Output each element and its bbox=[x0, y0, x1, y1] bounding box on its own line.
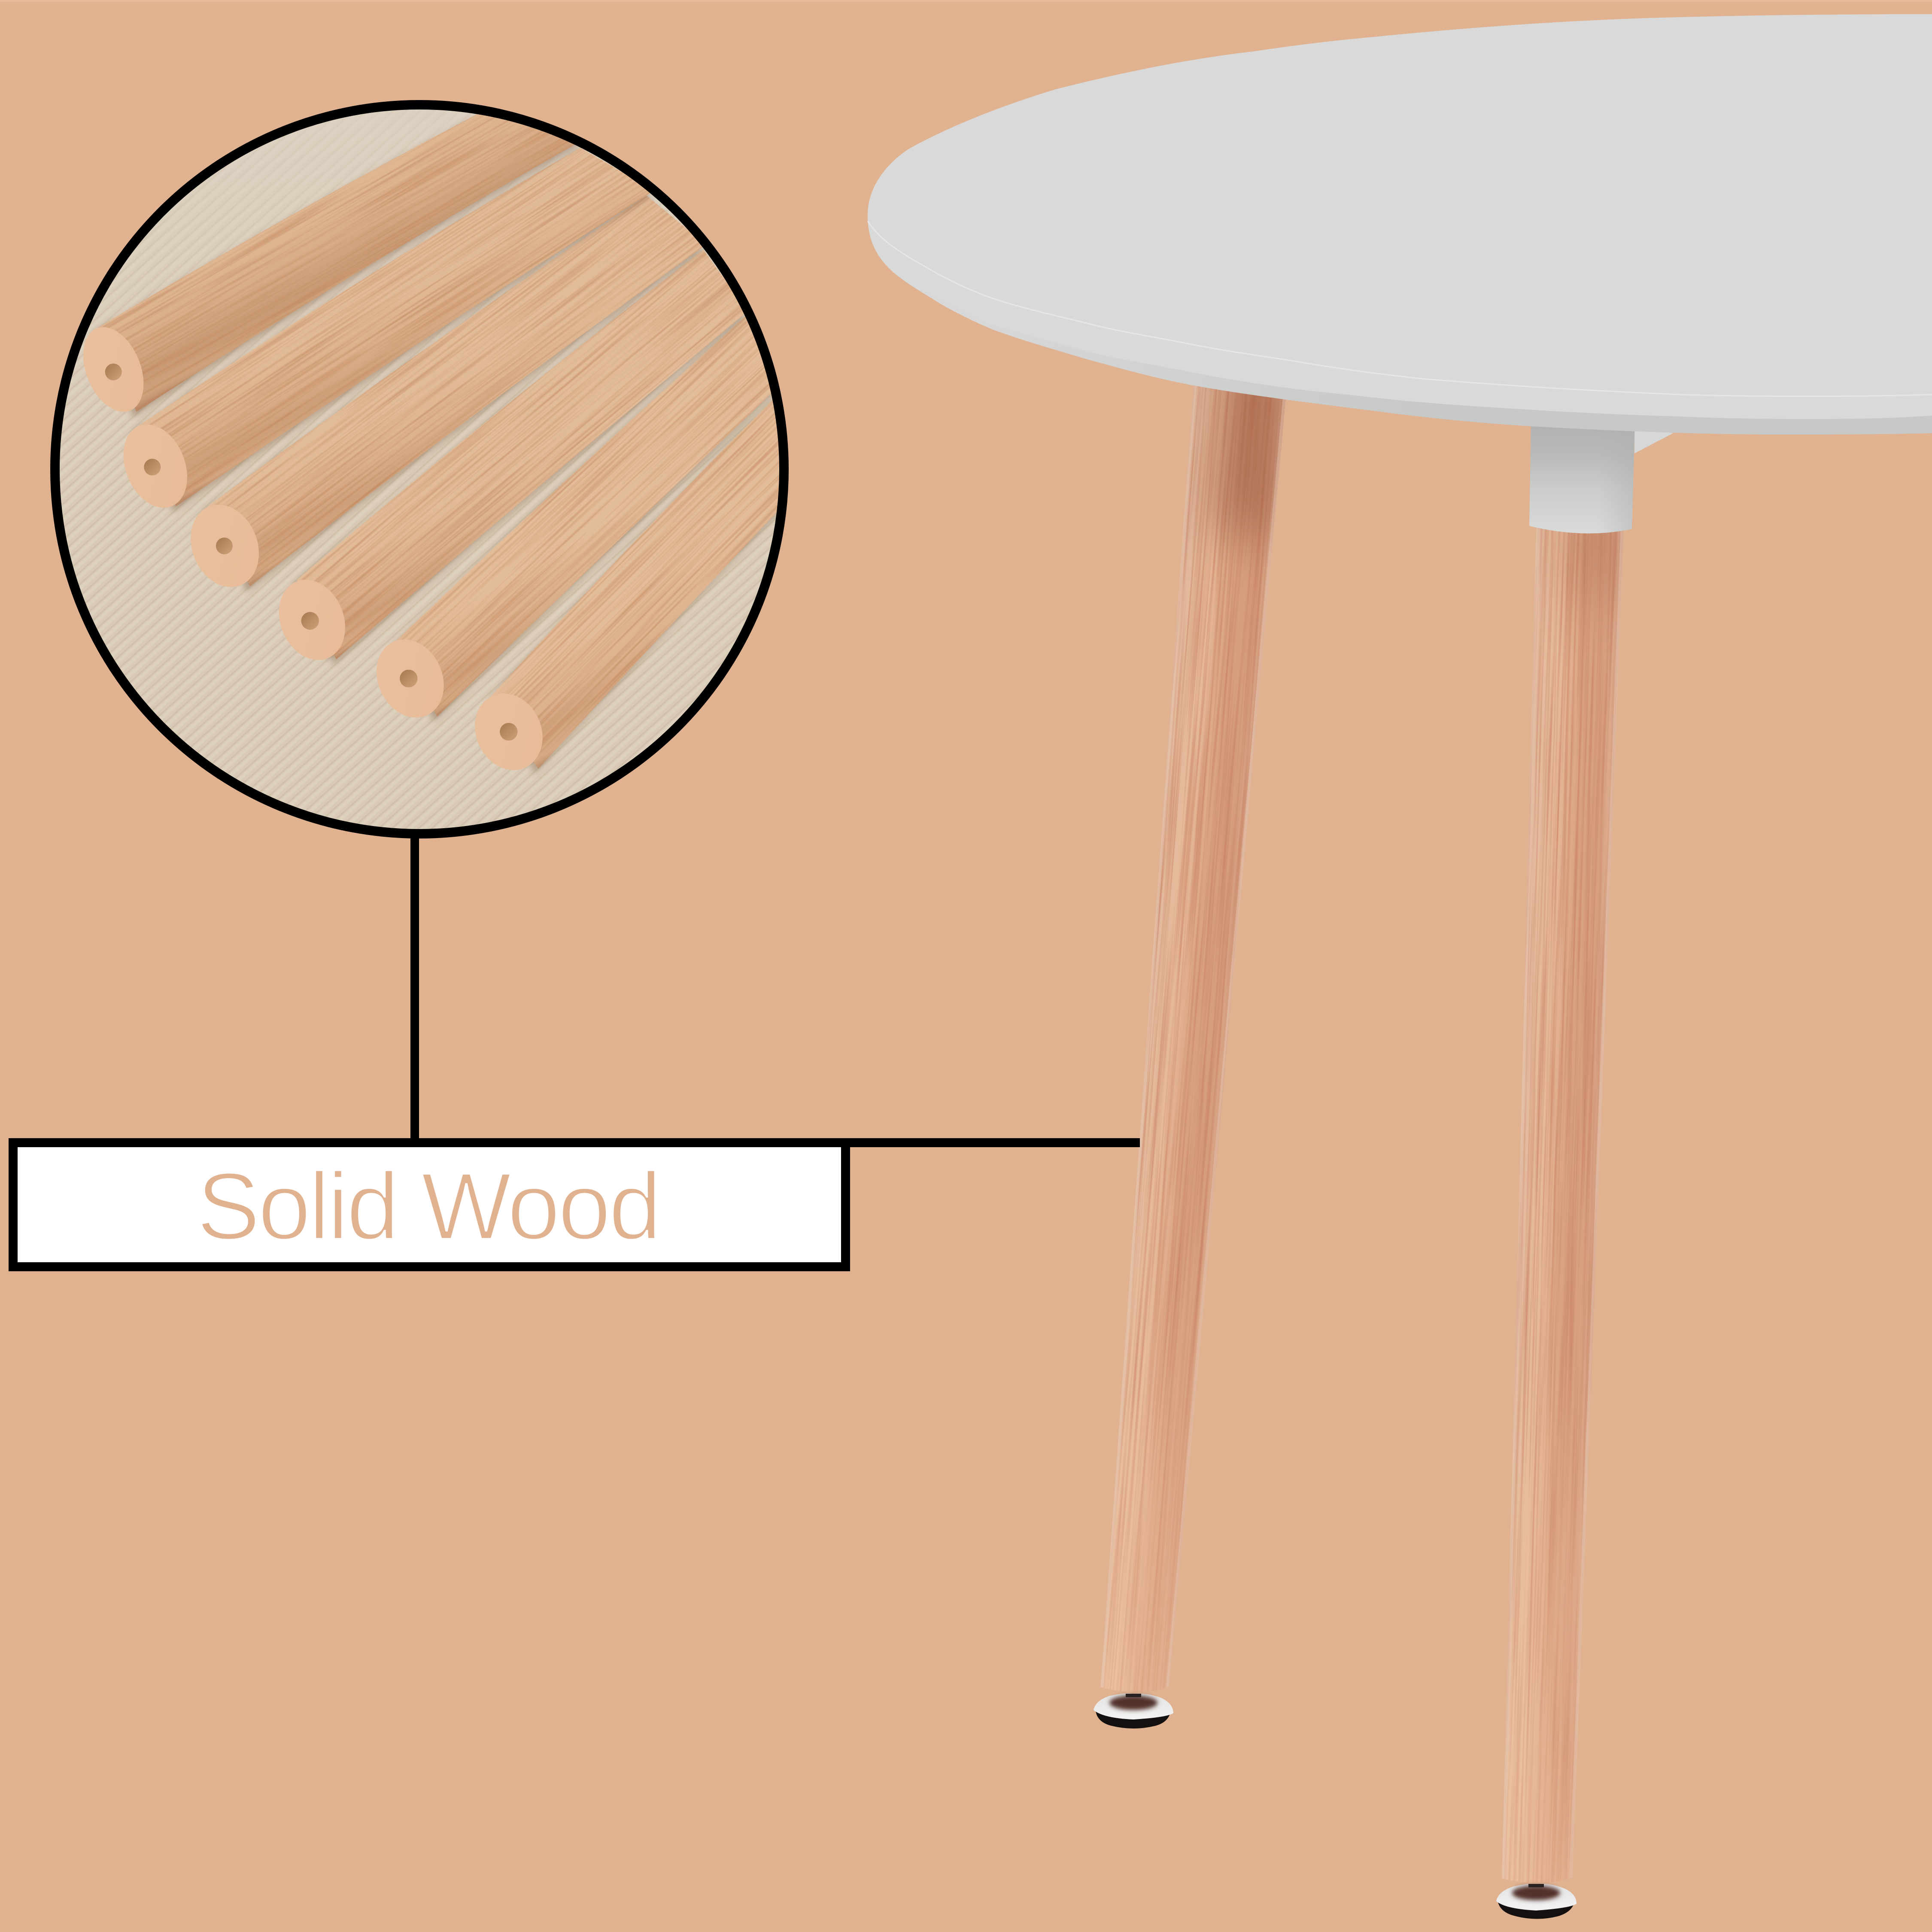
rods photo inside the lens bbox=[0, 0, 913, 866]
table leg: front left bbox=[972, 333, 1411, 1771]
rod 1 bbox=[0, 0, 690, 545]
table top bbox=[868, 14, 1932, 434]
label text: Solid Wood bbox=[197, 1153, 662, 1260]
label: solid wood bbox=[13, 1143, 846, 1267]
lens ring bbox=[55, 105, 784, 834]
rod 6 bbox=[355, 309, 913, 866]
magnified detail: solid wood rods bbox=[0, 0, 913, 866]
connector: label to leg bbox=[841, 1138, 1140, 1147]
leg bracket bbox=[1529, 423, 1673, 533]
foot glide: right leg bbox=[1496, 1884, 1577, 1919]
woven cloth surface bbox=[43, 94, 797, 848]
table leg: back right bbox=[1437, 469, 1689, 1932]
label box bbox=[13, 1143, 846, 1267]
connector: lens to label bbox=[410, 833, 419, 1139]
table illustration bbox=[868, 14, 1932, 1932]
foot glide: left leg bbox=[1094, 1693, 1173, 1728]
rod 2 bbox=[39, 18, 737, 615]
rod 4 bbox=[192, 141, 854, 764]
rod 5 bbox=[286, 225, 884, 811]
rod 3 bbox=[116, 76, 806, 698]
